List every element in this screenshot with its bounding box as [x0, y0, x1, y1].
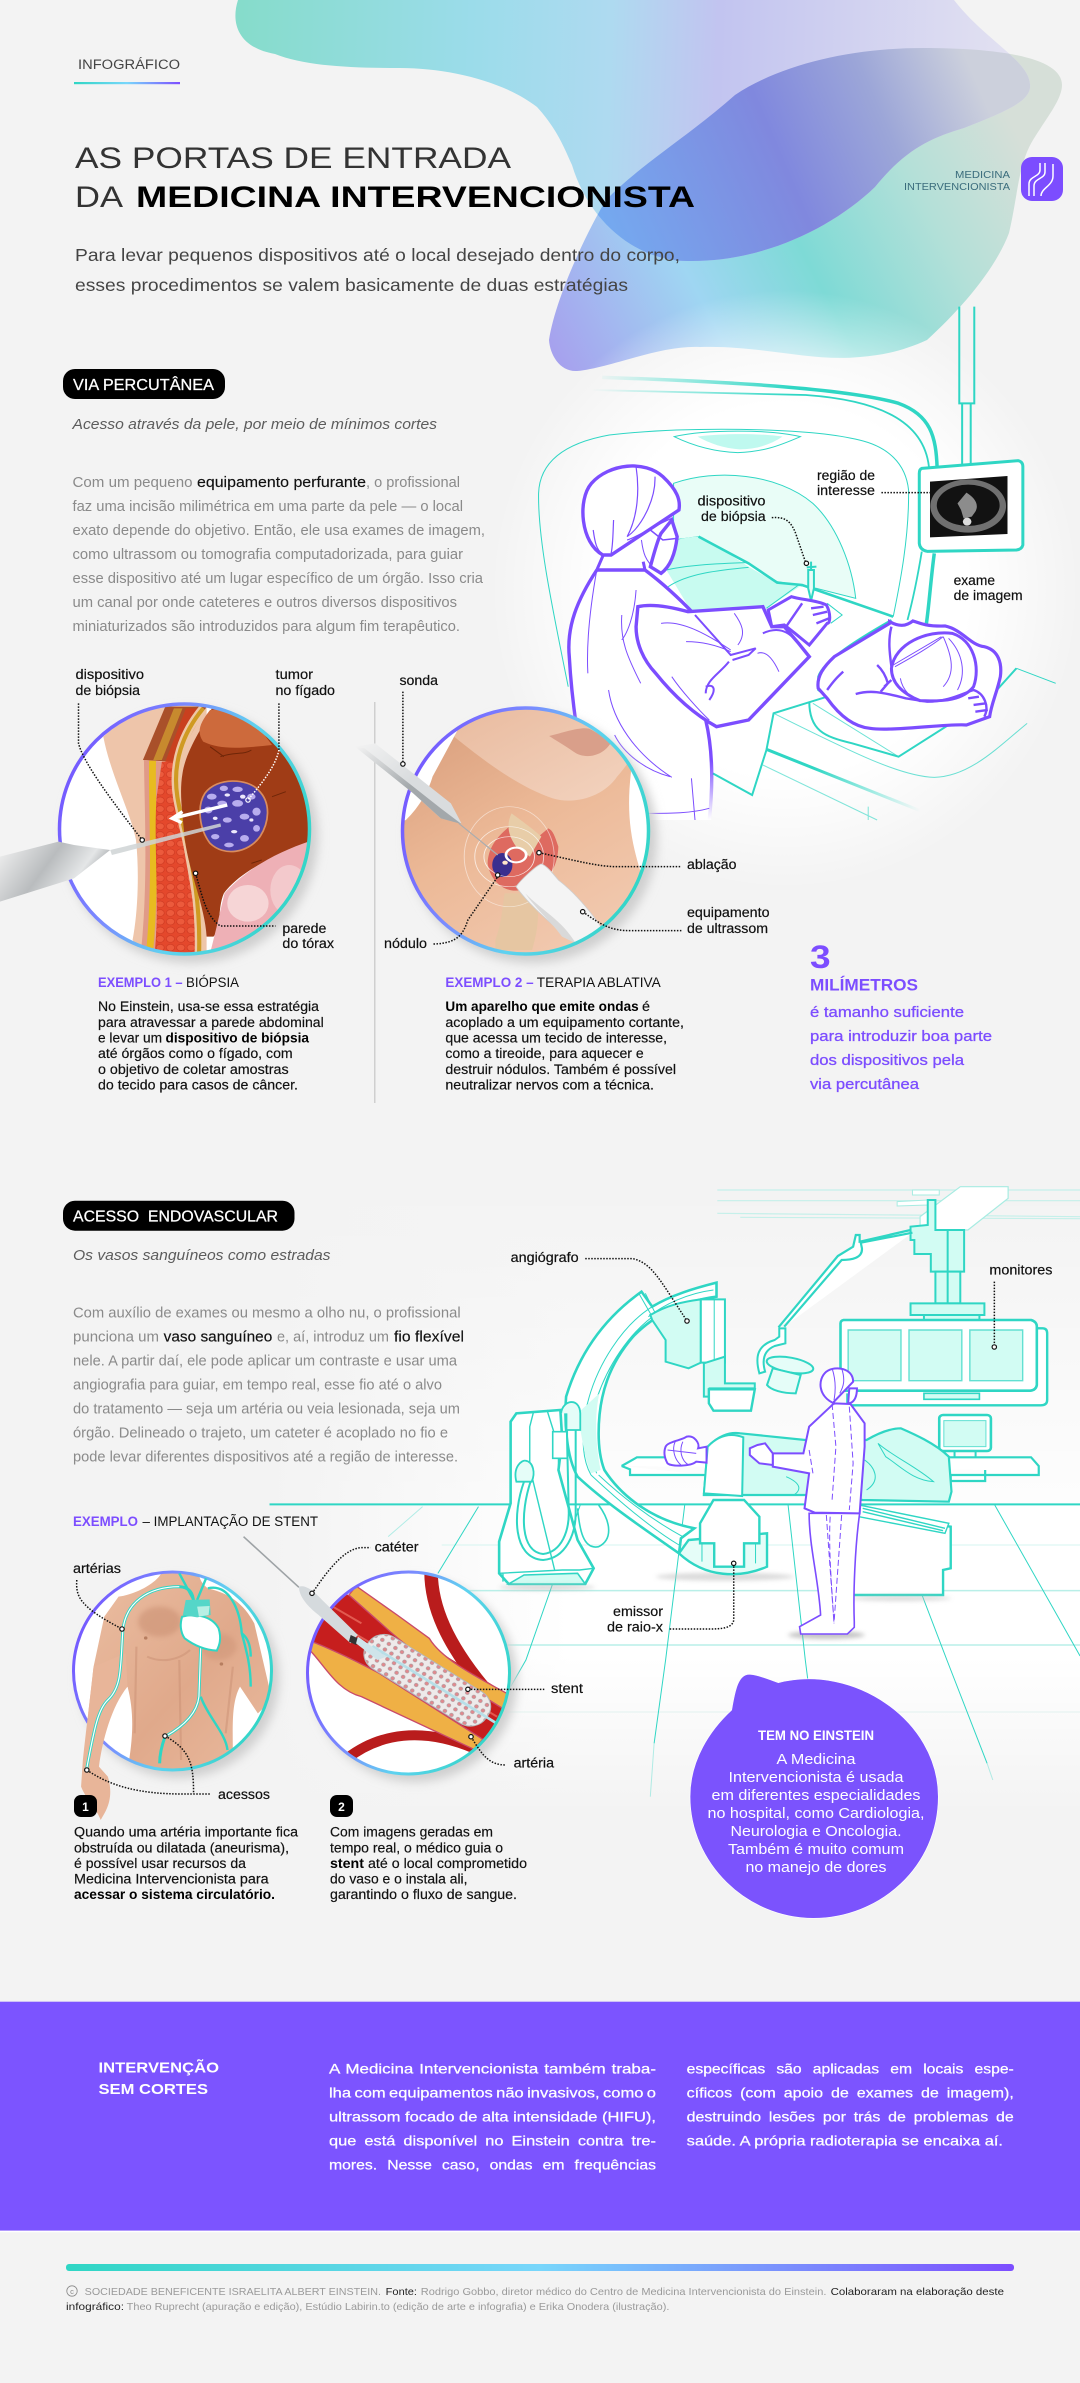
section tagline: Acesso através da pele, por meio de mínimos cortes — [71, 416, 438, 433]
artery lumen — [314, 1594, 502, 1739]
text columns: A Medicina Intervencionista também traba- — [329, 2060, 656, 2076]
step 1 — [74, 1795, 299, 1902]
emitter — [656, 1500, 794, 1581]
circle: torso — [74, 1568, 279, 1820]
text: exemplo 2: é — [642, 999, 650, 1014]
subtitle: esses procedimentos se valem basicamente de duas estratégias — [75, 275, 628, 295]
title — [75, 142, 695, 214]
ceiling lines — [717, 1190, 1080, 1219]
text block: percutânea: equipamento perfurante — [197, 475, 366, 491]
subtitle: Para levar pequenos dispositivos até o local desejado dentro do corpo, — [75, 245, 680, 265]
series tag: medicina intervencionista: INTERVENCIONISTA — [904, 181, 1010, 193]
patient under sheet — [664, 1428, 951, 1502]
text: exemplo 1 — [98, 975, 324, 1092]
ultrasound probe — [516, 864, 603, 943]
stat: 3 milímetros: 3 — [810, 939, 831, 975]
text: exemplo 1: EXEMPLO 1 – — [98, 975, 183, 990]
step 2: Com imagens geradas em — [330, 1825, 493, 1840]
title: AS PORTAS DE ENTRADA — [75, 142, 511, 175]
footer credits: SOCIEDADE BENEFICENTE ISRAELITA ALBERT EINSTEIN. — [85, 2286, 381, 2298]
step 2: do vaso e o instala ali, — [330, 1872, 468, 1886]
panel: intervenção sem cortes — [0, 2002, 1080, 2232]
text block: endovascular: pode levar diferentes dispositivos até a região de interesse. — [73, 1449, 458, 1465]
callout: tem no einstein: no hospital, como Cardiologia, — [708, 1806, 924, 1822]
heading: exemplo stent: EXEMPLO — [73, 1514, 138, 1529]
footer credits: c — [70, 2287, 74, 2296]
labels: CT scene: de imagem — [954, 588, 1023, 603]
table — [622, 1457, 1039, 1601]
labels: angiography: angiógrafo — [511, 1250, 579, 1265]
text columns: ultrassom focado de alta intensidade (HIFU), — [329, 2108, 656, 2124]
kicker: infográfico: INFOGRÁFICO — [78, 57, 180, 72]
callout: tem no einstein: TEM NO EINSTEIN — [758, 1728, 874, 1743]
heading: exemplo stent: – IMPLANTAÇÃO DE STENT — [142, 1514, 318, 1529]
text columns: destruindo lesões por trás de problemas de — [687, 2108, 1014, 2124]
labels and leaders: example circles: do tórax — [282, 936, 334, 951]
text: exemplo 2: neutralizar nervos com a técnica. — [445, 1078, 654, 1092]
labels and leaders: stent: catéter — [375, 1540, 419, 1555]
text block: percutânea: miniaturizados são introduzidos para algum fim terapêutico. — [72, 619, 460, 635]
nodule — [492, 853, 512, 877]
labels and leaders: stent: artéria — [514, 1756, 555, 1771]
subtitle — [75, 245, 680, 295]
extraction arrow — [172, 805, 227, 823]
labels and leaders: example circles: parede — [282, 921, 326, 936]
labels and leaders: example circles: equipamento — [687, 905, 770, 920]
labels and leaders: example circles: de biópsia — [76, 683, 140, 698]
text block: endovascular: e, aí, introduz um — [277, 1329, 389, 1345]
text block: endovascular: Com auxílio de exames ou mesmo a olho nu, o profissional — [73, 1305, 461, 1321]
text block: endovascular: fio flexível — [394, 1329, 464, 1345]
labels: angiography — [511, 1250, 1053, 1635]
text: exemplo 2 — [445, 975, 684, 1092]
monitor pole — [959, 307, 974, 465]
stat: 3 milímetros: para introduzir boa parte — [810, 1028, 992, 1045]
biopsy needle probe — [0, 823, 221, 902]
text block: percutânea: , o profissional — [366, 475, 460, 491]
text: exemplo 1: BIÓPSIA — [186, 975, 239, 990]
floor glow, angiography room — [270, 1190, 1080, 1815]
stat: 3 milímetros: MILÍMETROS — [810, 976, 918, 995]
stat: 3 milímetros — [810, 939, 992, 1093]
gantry lens detail — [674, 431, 800, 453]
shadow — [499, 1585, 595, 1590]
text: exemplo 2: destruir nódulos. Também é possível — [445, 1062, 676, 1077]
series tag: medicina intervencionista: MEDICINA — [955, 169, 1010, 181]
labels and leaders: example circles: sonda — [400, 673, 438, 688]
triple monitors — [841, 1320, 1047, 1405]
floor grid — [270, 1504, 1080, 1797]
labels and leaders: stent: acessos — [218, 1787, 270, 1802]
illustration: CT biopsy scene — [539, 307, 1056, 820]
pill: via percutânea: VIA PERCUTÂNEA — [73, 375, 214, 394]
text columns — [329, 2060, 1014, 2172]
callout: tem no einstein: no manejo de dores — [746, 1860, 886, 1876]
sonda probe — [355, 743, 498, 855]
labels and leaders: example circles: de ultrassom — [687, 921, 768, 936]
illustration: angiography room — [270, 1187, 1080, 1797]
labels and leaders: stent: artérias — [73, 1561, 121, 1576]
text block: percutânea: como ultrassom ou tomografia computadorizada, para guiar — [72, 547, 463, 563]
footer credits: Theo Ruprecht (apuração e edição), Estúdio Labirin.to (edição de arte e infografia) e Erika Onodera (ilustração). — [127, 2301, 669, 2313]
text block: percutânea: Com um pequeno — [72, 475, 192, 491]
arm and hand — [81, 1653, 127, 1820]
thyroid and trachea — [488, 813, 558, 950]
step 1: Medicina Intervencionista para — [74, 1872, 269, 1886]
text: exemplo 1: o objetivo de coletar amostras — [98, 1062, 289, 1077]
standing doctor — [750, 1368, 865, 1639]
pill: acesso endovascular — [63, 1201, 294, 1231]
text block: percutânea: exato depende do objetivo. Então, ele usa exames de imagem, — [72, 523, 485, 539]
heading: SEM CORTES — [98, 2081, 208, 2098]
title: DA — [75, 181, 123, 214]
labels and leaders: example circles: ablação — [687, 857, 736, 872]
heading — [98, 2059, 219, 2098]
text block: endovascular — [73, 1305, 464, 1465]
labels and leaders: example circles — [76, 667, 770, 951]
surgical lamp — [757, 1230, 912, 1393]
syringe device — [807, 562, 816, 601]
liver — [181, 703, 313, 937]
labels: angiography: emissor — [613, 1604, 664, 1619]
text: exemplo 1: dispositivo de biópsia — [166, 1030, 309, 1046]
labels: CT scene: dispositivo — [698, 494, 766, 509]
series tag: medicina intervencionista — [904, 157, 1063, 201]
step 1: é possível usar recursos da — [74, 1856, 246, 1871]
torso skin — [88, 1568, 272, 1775]
title: MEDICINA INTERVENCIONISTA — [136, 181, 695, 214]
labels: angiography: monitores — [989, 1262, 1053, 1277]
callout: tem no einstein: A Medicina — [776, 1752, 857, 1768]
text block: percutânea: esse dispositivo até um lugar específico de um órgão. Isso cria — [72, 571, 484, 587]
footer credits: Colaboraram na elaboração deste — [831, 2286, 1004, 2298]
text: exemplo 1: para atravessar a parede abdominal — [98, 1015, 324, 1030]
artery lines — [86, 1573, 251, 1770]
detector — [650, 1299, 755, 1411]
text block: percutânea — [72, 475, 485, 635]
text: exemplo 2: acoplado a um equipamento cortante, — [445, 1015, 684, 1030]
step 2: garantindo o fluxo de sangue. — [330, 1887, 517, 1902]
labels and leaders: example circles: tumor — [276, 667, 314, 682]
circle: stent — [244, 1537, 517, 1782]
CT monitor — [919, 461, 1023, 551]
catheter — [244, 1537, 386, 1660]
icon: logo — [1021, 157, 1063, 201]
stat: 3 milímetros: é tamanho suficiente — [810, 1004, 964, 1021]
table and pillow — [713, 620, 1056, 820]
text: exemplo 2: TERAPIA ABLATIVA — [537, 975, 661, 990]
text block: endovascular: do tratamento — seja um artéria ou veia lesionada, seja um — [73, 1401, 460, 1417]
circle: biopsy — [0, 703, 318, 963]
labels: angiography: de raio-x — [607, 1620, 663, 1635]
step 1: 1 — [82, 1800, 89, 1814]
icon: heart — [181, 1599, 220, 1651]
skin and tissue layers — [103, 703, 207, 957]
kicker: infográfico — [74, 57, 180, 84]
text: exemplo 2: EXEMPLO 2 – — [445, 975, 534, 990]
pill: via percutânea — [63, 369, 225, 399]
text block: endovascular: órgão. Delineado o trajeto, um cateter é acoplado no fio e — [73, 1425, 448, 1441]
callout: tem no einstein: em diferentes especialidades — [712, 1788, 920, 1804]
side monitor — [939, 1415, 991, 1458]
text: exemplo 1: e levar um — [98, 1030, 162, 1046]
labels: CT scene: exame — [954, 573, 995, 588]
text: exemplo 1: do tecido para casos de câncer. — [98, 1078, 298, 1092]
ceiling mount and boom — [897, 1187, 1008, 1320]
header gradient blobs — [235, 0, 1062, 371]
step 2: stent — [330, 1856, 365, 1871]
callout: tem no einstein: Neurologia e Oncologia. — [730, 1824, 902, 1840]
step 2: até o local comprometido — [368, 1856, 527, 1871]
text: exemplo 2: que acessa um tecido de interesse, — [445, 1030, 667, 1046]
footer gradient bar — [66, 2264, 1014, 2271]
text columns: cíficos (com apoio de exames de imagem), — [687, 2084, 1014, 2100]
face and lips — [454, 707, 631, 801]
step 2: tempo real, o médico guia o — [330, 1840, 503, 1855]
callout: tem no einstein: Também é muito comum — [728, 1842, 904, 1858]
labels and leaders: stent: stent — [551, 1681, 583, 1696]
text: exemplo 2: Um aparelho que emite ondas — [445, 999, 639, 1014]
ablation waves — [464, 807, 554, 907]
text block: endovascular: angiografia para guiar, em tempo real, esse fio até o alvo — [73, 1377, 442, 1393]
neck skin — [404, 736, 640, 952]
text columns: lha com equipamentos não invasivos, como o — [329, 2084, 656, 2100]
doctor — [569, 466, 830, 820]
divider — [374, 702, 376, 1103]
text block: endovascular: nele. A partir daí, ele pode aplicar um contraste e usar uma — [73, 1353, 458, 1369]
text block: endovascular: punciona um — [73, 1329, 159, 1345]
labels and leaders: example circles: nódulo — [384, 936, 427, 951]
C-arm — [499, 1283, 794, 1590]
labels: CT scene — [698, 468, 1023, 603]
text columns: específicas são aplicadas em locais espe- — [687, 2060, 1014, 2076]
text: exemplo 1: até órgãos como o fígado, com — [98, 1046, 293, 1061]
labels: CT scene: região de — [817, 468, 875, 483]
text block: endovascular: vaso sanguíneo — [164, 1329, 272, 1345]
callout: tem no einstein: Intervencionista é usada — [728, 1770, 905, 1786]
step 2: 2 — [338, 1800, 345, 1814]
heading: INTERVENÇÃO — [98, 2059, 219, 2077]
text: exemplo 2: como a tireoide, para aquecer e — [445, 1046, 644, 1061]
labels and leaders: example circles: no fígado — [276, 683, 335, 698]
base — [499, 1402, 609, 1590]
text block: percutânea: faz uma incisão milimétrica em uma parte da pele — o local — [72, 499, 463, 515]
text: exemplo 1: No Einstein, usa-se essa estratégia — [98, 999, 319, 1014]
step 1: Quando uma artéria importante fica — [74, 1825, 299, 1840]
stent mesh — [363, 1634, 496, 1727]
labels: CT scene: de biópsia — [701, 509, 766, 524]
stat: 3 milímetros: via percutânea — [810, 1076, 920, 1093]
labels and leaders: example circles: dispositivo — [76, 667, 144, 682]
tumor — [200, 781, 268, 852]
footer credits — [66, 2286, 1004, 2313]
callout: tem no einstein — [690, 1674, 938, 1918]
section tagline: Os vasos sanguíneos como estradas — [73, 1247, 331, 1264]
labels: CT scene: interesse — [817, 483, 875, 498]
pill: acesso endovascular: ACESSO ENDOVASCULAR — [73, 1209, 278, 1226]
text columns: saúde. A própria radioterapia se encaixa aí. — [687, 2132, 1003, 2148]
step 1: acessar o sistema circulatório. — [74, 1887, 275, 1902]
text columns: que está disponível no Einstein contra tre- — [329, 2132, 656, 2148]
text columns: mores. Nesse caso, ondas em frequências — [329, 2156, 656, 2172]
footer credits: Fonte: — [386, 2286, 417, 2298]
step 1: obstruída ou dilatada (aneurisma), — [74, 1840, 289, 1855]
text block: percutânea: um canal por onde cateteres e outros diversos dispositivos — [72, 595, 457, 611]
footer credits: infográfico: — [66, 2301, 124, 2313]
branch arteries — [347, 1572, 483, 1758]
plaque walls — [310, 1586, 513, 1749]
white glow behind CT scene — [490, 290, 1080, 890]
intestines — [211, 842, 307, 950]
labels and leaders: stent — [73, 1540, 583, 1802]
stat: 3 milímetros: dos dispositivos pela — [810, 1052, 965, 1069]
step 2 — [330, 1795, 527, 1902]
footer credits: Rodrigo Gobbo, diretor médico do Centro de Medicina Intervencionista do Einstein. — [421, 2286, 826, 2298]
circle: thyroid ablation — [355, 707, 657, 963]
patient — [818, 621, 1001, 729]
